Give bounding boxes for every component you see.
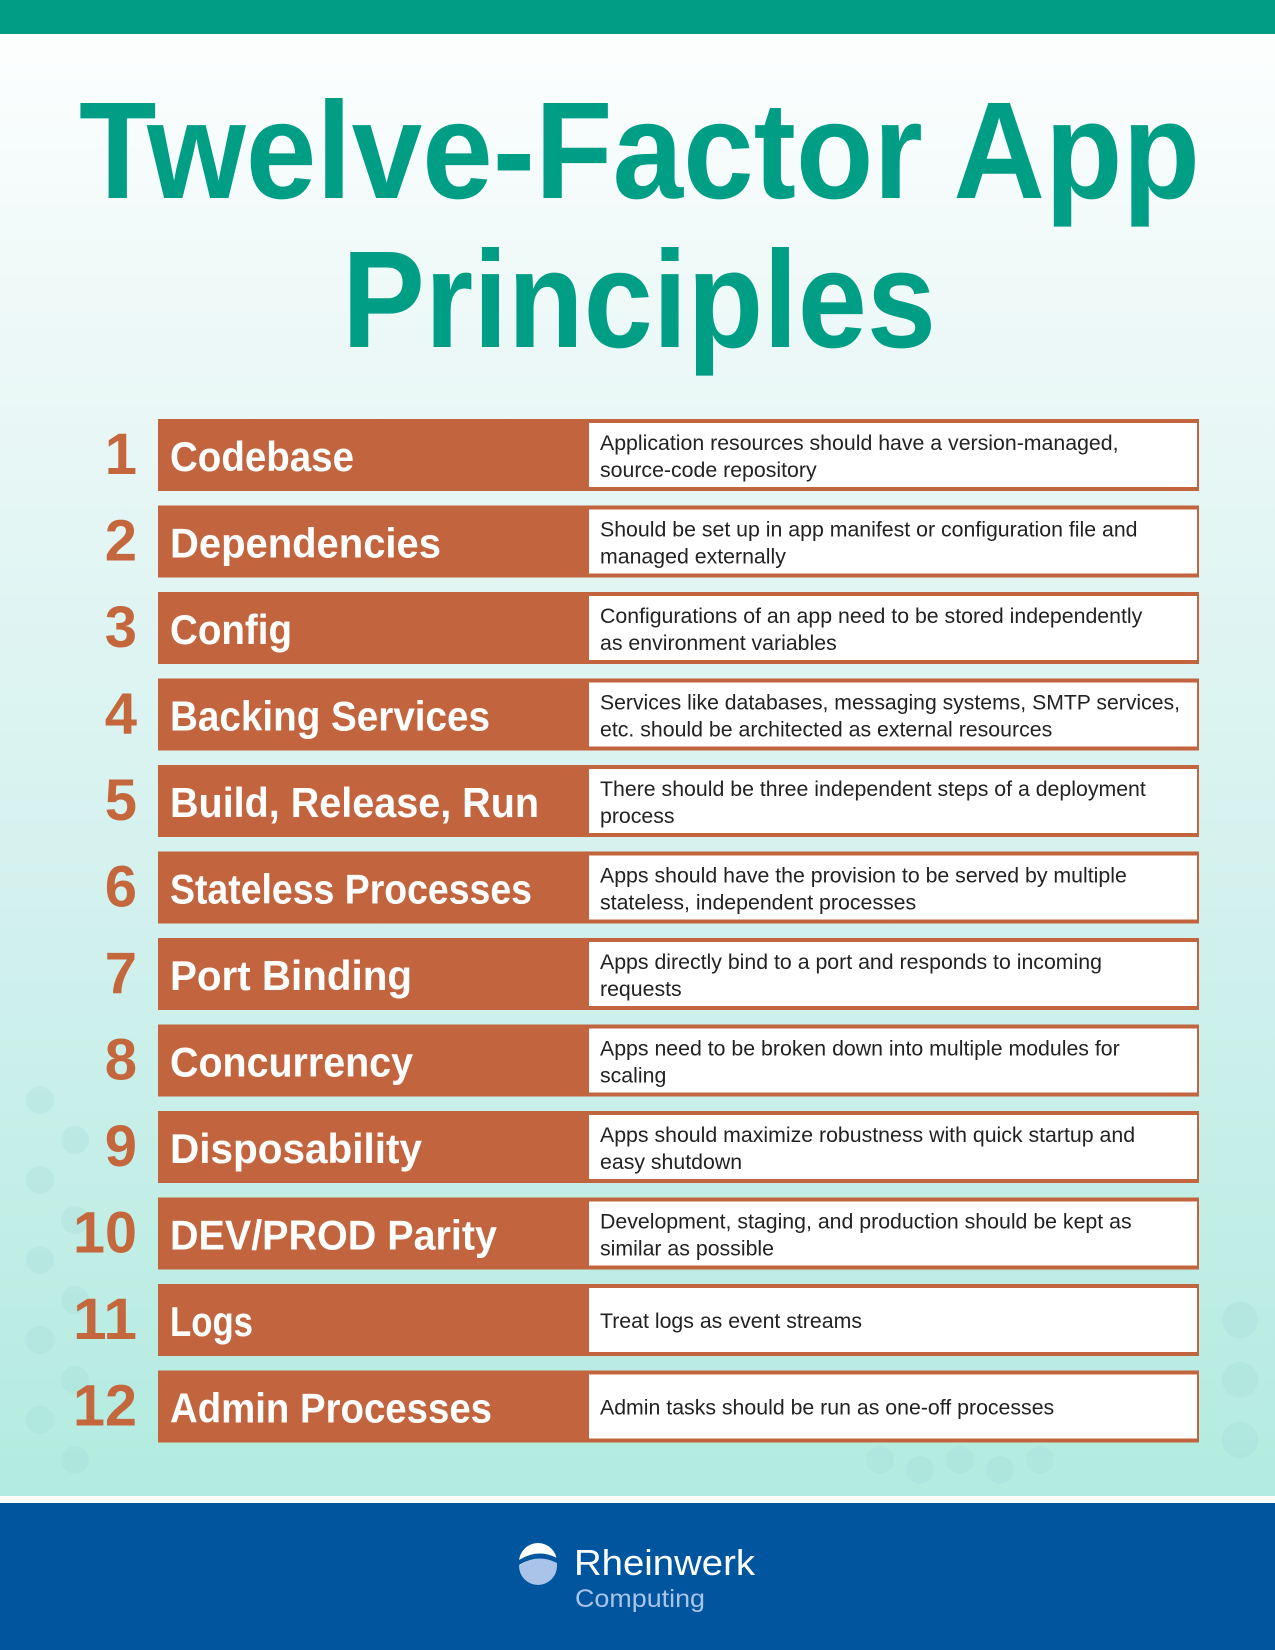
footer: Computing — [575, 1585, 705, 1613]
row 3: 3 — [105, 595, 137, 660]
row 5: process — [600, 804, 675, 828]
row 1: Codebase — [170, 433, 354, 480]
row 1: Application resources should have a version-managed, — [600, 431, 1119, 455]
row 7: Port Binding — [170, 952, 412, 999]
row 12: Admin Processes — [170, 1384, 492, 1432]
row 12: Admin tasks should be run as one-off processes — [600, 1396, 1054, 1420]
row 7 — [105, 938, 1199, 1010]
row 1 — [105, 419, 1199, 491]
title: Twelve-Factor App — [79, 74, 1200, 228]
brand text: Rheinwerk — [574, 1542, 756, 1583]
row 2: 2 — [105, 508, 137, 574]
row 1: source-code repository — [600, 458, 817, 482]
row 2: Dependencies — [170, 520, 441, 566]
row 2 — [105, 506, 1199, 578]
row 2: Should be set up in app manifest or configuration file and — [600, 518, 1138, 542]
row 7: requests — [600, 977, 682, 1001]
row 9: easy shutdown — [600, 1150, 742, 1174]
row 6: Stateless Processes — [170, 866, 532, 912]
row 7: 7 — [105, 941, 137, 1006]
title — [79, 74, 1200, 377]
row 4: Backing Services — [170, 692, 490, 740]
row 2: managed externally — [600, 544, 786, 568]
row 10: Development, staging, and production should be kept as — [600, 1210, 1132, 1234]
row 6 — [105, 852, 1199, 924]
footer — [0, 1503, 1275, 1650]
row 9: Disposability — [170, 1125, 423, 1172]
row 3: as environment variables — [600, 631, 837, 655]
row 3: Configurations of an app need to be stored independently — [600, 604, 1143, 628]
row 5: 5 — [105, 768, 137, 833]
row 8 — [105, 1024, 1199, 1096]
row 3 — [105, 592, 1199, 664]
row 10: similar as possible — [600, 1236, 774, 1260]
row 10 — [73, 1198, 1199, 1270]
row 4: Services like databases, messaging systems, SMTP services, — [600, 690, 1180, 714]
row 8: 8 — [105, 1028, 137, 1092]
row 9 — [105, 1111, 1199, 1183]
row 1: 1 — [105, 422, 137, 487]
row 4: etc. should be architected as external resources — [600, 718, 1052, 742]
row 12: 12 — [73, 1374, 137, 1438]
row 7: Apps directly bind to a port and responds to incoming — [600, 950, 1102, 974]
row 3: Config — [170, 606, 292, 653]
row 5 — [105, 765, 1199, 837]
row 4 — [105, 678, 1199, 750]
row 5: Build, Release, Run — [170, 779, 539, 826]
row 8: Apps need to be broken down into multiple modules for — [600, 1036, 1120, 1060]
row 6: 6 — [105, 854, 137, 920]
row 11: Treat logs as event streams — [600, 1309, 862, 1333]
list of principles — [73, 419, 1199, 1442]
title: Principles — [342, 223, 936, 377]
row 12 — [73, 1370, 1199, 1442]
row 9: Apps should maximize robustness with quick startup and — [600, 1123, 1135, 1147]
row 8: scaling — [600, 1064, 666, 1088]
top bar — [0, 0, 1275, 34]
row 10: DEV/PROD Parity — [170, 1212, 498, 1258]
row 11: Logs — [170, 1298, 253, 1345]
row 6: Apps should have the provision to be served by multiple — [600, 864, 1127, 888]
row 9: 9 — [105, 1114, 137, 1179]
row 5: There should be three independent steps of a deployment — [600, 777, 1146, 801]
row 11 — [73, 1284, 1199, 1356]
row 8: Concurrency — [170, 1038, 414, 1086]
row 11: 11 — [73, 1287, 137, 1352]
row 10: 10 — [73, 1200, 137, 1266]
row 6: stateless, independent processes — [600, 890, 916, 914]
row 4: 4 — [105, 682, 137, 746]
icon: logo — [519, 1543, 557, 1585]
